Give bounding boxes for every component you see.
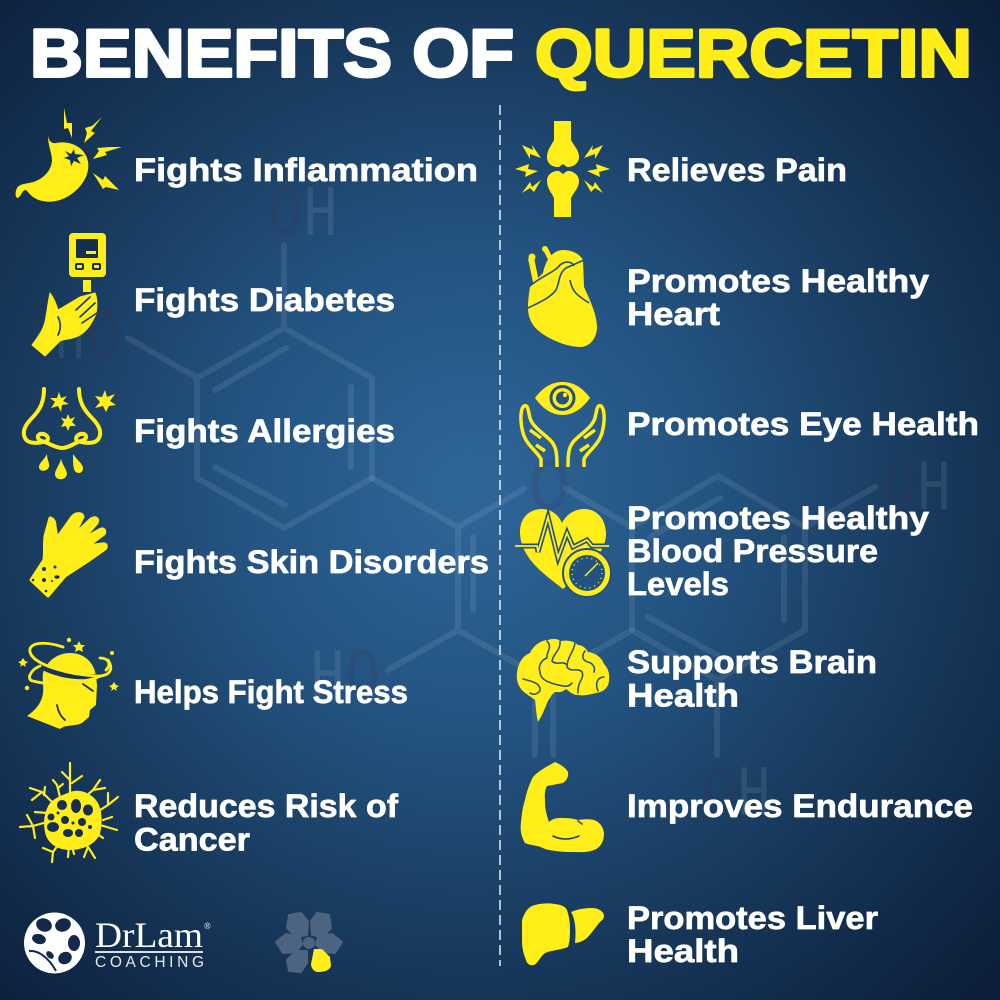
molecule watermark: O — [345, 638, 380, 720]
icon: glucose meter and hand — [32, 233, 106, 356]
molecule watermark: O — [87, 298, 121, 380]
icon: liver — [522, 903, 604, 965]
label: Fights Allergies — [134, 413, 395, 449]
label: Promotes Healthy — [627, 500, 929, 536]
icon: stomach with lightning — [16, 108, 122, 202]
molecule watermark: H — [310, 638, 345, 720]
label: Helps Fight Stress — [134, 674, 408, 710]
icon: cancer cell — [20, 763, 118, 862]
benefit: reduces risk of cancer: Cancer — [134, 822, 250, 858]
benefit: fights diabetes — [32, 233, 395, 356]
center divider — [499, 105, 501, 966]
benefit: fights allergies — [24, 389, 395, 479]
benefit: improves endurance — [521, 762, 973, 852]
title — [30, 16, 972, 92]
molecule watermark: H — [303, 175, 338, 257]
wordmark — [95, 915, 211, 971]
flower logo — [276, 913, 342, 972]
benefit: reduces risk of cancer — [20, 763, 398, 862]
wordmark: COACHING — [95, 954, 204, 971]
molecule watermark: H — [917, 449, 951, 531]
logo: DrLam Coaching — [24, 912, 211, 974]
label: Relieves Pain — [627, 152, 847, 188]
benefit: promotes healthy blood pressure levels: Levels — [627, 566, 729, 602]
icon: dizzy head — [18, 638, 119, 729]
molecule watermark — [55, 175, 951, 837]
benefit: supports brain health: Health — [627, 678, 739, 714]
label: Supports Brain — [627, 644, 877, 680]
benefit: promotes eye health — [521, 382, 979, 467]
label: Promotes Healthy — [627, 263, 929, 299]
title: QUERCETIN — [535, 16, 972, 92]
logo mark — [24, 912, 85, 974]
benefit: helps fight stress — [18, 638, 408, 729]
icon: joint with lightning — [515, 121, 610, 217]
benefit: promotes liver health — [522, 900, 878, 969]
icon: flexed arm — [521, 762, 604, 852]
benefit: fights skin disorders — [31, 514, 489, 596]
label: Fights Inflammation — [134, 152, 478, 188]
label: Promotes Eye Health — [627, 406, 979, 442]
icon: hand with spots — [31, 514, 106, 596]
molecule watermark: O — [528, 449, 571, 531]
label: Fights Diabetes — [134, 282, 395, 318]
molecule watermark: O — [703, 755, 737, 837]
benefit: promotes liver health: Health — [627, 933, 739, 969]
label: Fights Skin Disorders — [134, 544, 489, 580]
benefit: relieves pain — [515, 121, 847, 217]
benefit: fights inflammation — [16, 108, 478, 202]
icon: eye in hands — [521, 382, 604, 467]
molecule watermark: O — [268, 175, 303, 257]
molecule watermark: H — [55, 298, 85, 380]
benefit: promotes healthy blood pressure levels: Blood Pressure — [627, 533, 878, 569]
benefit: supports brain health — [517, 639, 877, 722]
title: BENEFITS OF — [30, 16, 514, 92]
label: Improves Endurance — [627, 788, 973, 824]
icon: heart with gauge — [515, 509, 611, 597]
molecule watermark: H — [737, 755, 771, 837]
icon: anatomical heart — [528, 246, 597, 347]
label: Promotes Liver — [627, 900, 878, 936]
label: Reduces Risk of — [134, 788, 398, 824]
benefit: promotes healthy heart — [528, 246, 929, 347]
benefit: promotes healthy blood pressure levels — [515, 500, 929, 602]
wordmark: DrLam — [95, 915, 203, 955]
wordmark: ® — [204, 921, 211, 931]
benefit: promotes healthy heart: Heart — [627, 296, 720, 332]
icon: nose with sneeze — [24, 389, 116, 479]
molecule watermark: O — [883, 449, 917, 531]
icon: brain — [517, 639, 609, 722]
